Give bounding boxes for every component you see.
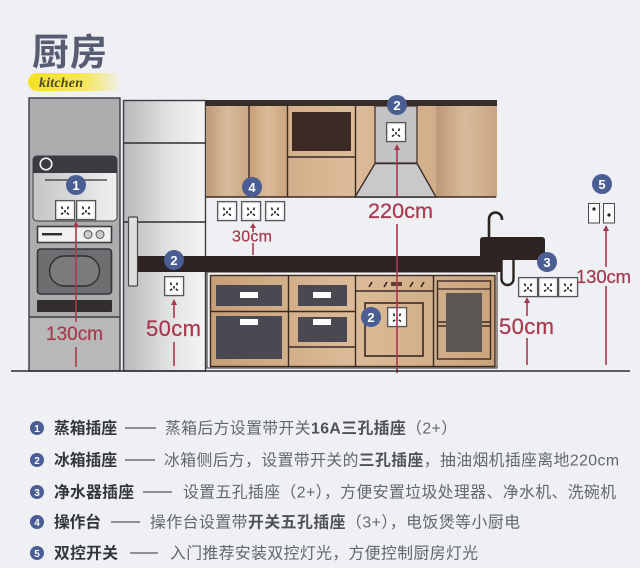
legend row 3	[30, 482, 616, 502]
tall unit right	[438, 281, 490, 359]
measure: 50cm fridge: 50cm	[146, 316, 201, 341]
legend row 2: 2	[34, 456, 40, 467]
sockets: water purifier	[519, 278, 578, 297]
double switch	[588, 204, 614, 223]
hood socket	[387, 123, 406, 142]
floor line	[11, 370, 630, 372]
badge 2 fridge	[164, 250, 184, 270]
built-in oven	[356, 282, 433, 356]
measure: 50cm sink	[499, 297, 554, 365]
built-in microwave	[292, 112, 351, 151]
badge 2 fridge: 2	[170, 253, 178, 268]
badge 3: 3	[543, 255, 551, 270]
measure: 30cm	[232, 223, 272, 255]
legend row 3: 设置五孔插座（2+），方便安置垃圾处理器、净水机、洗碗机	[183, 484, 616, 502]
legend row 3: 3	[34, 488, 40, 499]
badge 1: 1	[72, 178, 80, 193]
legend row 1: 1	[34, 424, 40, 435]
legend row 4: 操作台设置带开关五孔插座（3+），电饭煲等小厨电	[150, 512, 520, 532]
steam oven	[33, 156, 117, 221]
drain pipe	[502, 260, 514, 285]
measure: 30cm: 30cm	[232, 228, 272, 246]
panel: tall oven cabinet	[29, 98, 120, 371]
measure: 130cm switch: 130cm	[576, 266, 631, 287]
subtitle badge: kitchen	[28, 73, 122, 91]
legend row 5: 双控开关	[54, 544, 118, 562]
measure: 50cm fridge	[146, 299, 201, 366]
oven socket	[388, 308, 407, 327]
fridge socket	[165, 277, 184, 296]
badge 4: 4	[248, 180, 256, 195]
legend row 4	[30, 512, 520, 532]
title: 厨房	[32, 32, 107, 73]
measure: 50cm sink: 50cm	[499, 314, 554, 339]
measure: 220cm	[368, 144, 433, 373]
measure line over lower cabinet	[396, 256, 398, 366]
legend row 5	[30, 544, 478, 562]
legend row 2: 冰箱插座	[54, 450, 117, 470]
measure: 220cm: 220cm	[368, 198, 433, 223]
badge 2 oven	[361, 307, 381, 327]
sockets: steam oven	[56, 201, 96, 220]
subtitle badge: kitchen: kitchen	[39, 76, 83, 91]
measure: 130cm steam oven	[46, 221, 103, 367]
top dark rail	[206, 100, 497, 106]
legend row 1: 蒸箱后方设置带开关16A三孔插座（2+）	[165, 418, 457, 438]
dark drawer bar	[37, 300, 112, 312]
legend row 1: 蒸箱插座	[54, 418, 117, 438]
badge 5	[592, 174, 612, 194]
drawers middle	[298, 285, 347, 342]
badge 1	[66, 175, 86, 195]
badge 3	[537, 252, 557, 272]
fridge handle	[128, 217, 138, 286]
legend row 5: 5	[34, 549, 40, 560]
control strip	[38, 226, 112, 242]
microwave	[38, 249, 112, 294]
drawers left	[216, 285, 282, 359]
badge 2 oven: 2	[367, 310, 375, 325]
legend row 4: 4	[34, 518, 40, 529]
panel: lower cabinets	[207, 272, 497, 368]
badge 2 hood: 2	[393, 98, 401, 113]
badge 5: 5	[598, 177, 606, 192]
panel: fridge	[124, 100, 206, 371]
legend row 3: 净水器插座	[54, 482, 134, 502]
badge 2 hood	[387, 95, 407, 115]
panel: upper wall cabinets	[206, 100, 497, 197]
legend row 4: 操作台	[54, 512, 101, 532]
countertop and sink	[138, 237, 545, 285]
measure: 130cm switch	[576, 225, 631, 365]
legend row 2: 冰箱侧后方，设置带开关的三孔插座，抽油烟机插座离地220cm	[164, 450, 619, 470]
legend row 1	[30, 418, 457, 438]
faucet	[489, 213, 502, 237]
legend row 5: 入门推荐安装双控灯光，方便控制厨房灯光	[170, 544, 478, 562]
badge 4	[242, 177, 262, 197]
legend row 2	[30, 450, 619, 470]
sockets: countertop	[218, 202, 285, 221]
range hood	[355, 106, 436, 197]
measure: 130cm steam oven: 130cm	[46, 324, 103, 345]
